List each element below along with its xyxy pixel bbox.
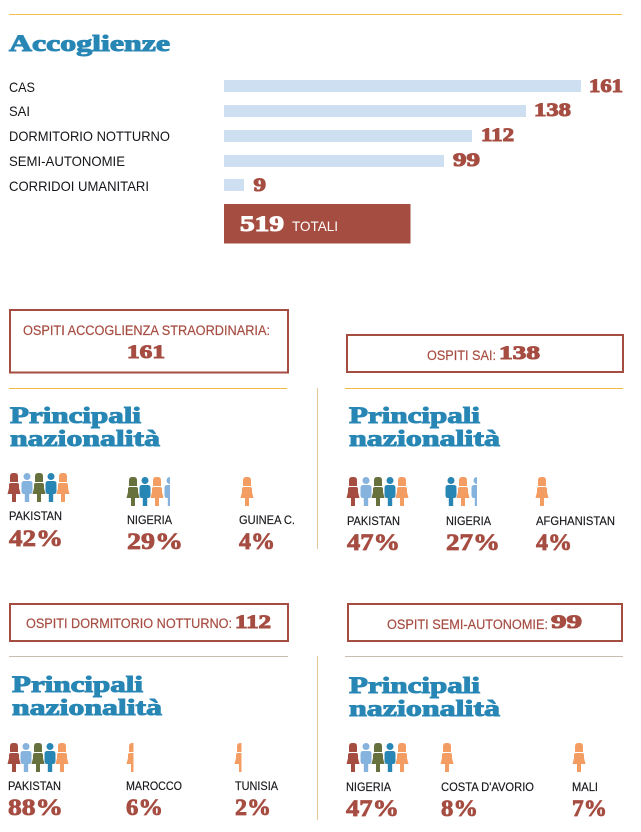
- bar chart: accoglienze: [9, 76, 623, 196]
- panel: nazionalità semi-autonomie: [346, 673, 607, 821]
- callout: ospiti semi-autonomie: 99: [551, 612, 582, 633]
- stat: Guinea C.: [239, 513, 295, 554]
- icon: Guinea: [240, 477, 254, 506]
- stat: Costa d'Avorio: [441, 780, 534, 821]
- heading: nazionalità: [10, 426, 161, 451]
- stat: Guinea C.: GUINEA C.: [239, 513, 295, 527]
- stat: Tunisia: TUNISIA: [235, 779, 278, 793]
- callout: ospiti semi-autonomie: [348, 604, 622, 641]
- heading: Principali: [10, 403, 142, 428]
- stat: Mali: 7%: [572, 796, 607, 821]
- callout: ospiti SAI: [347, 335, 623, 372]
- bar row: semi-autonomie: [9, 150, 480, 171]
- bar row: SAI: [9, 100, 571, 121]
- icon: Mali: [572, 743, 586, 772]
- callout: ospiti SAI: OSPITI SAI:: [427, 348, 496, 363]
- panel: nazionalità dormitorio: [8, 672, 278, 820]
- bar row: dormitorio notturno: [9, 125, 514, 146]
- stat: Pakistan: [347, 514, 400, 555]
- stat: Mali: MALI: [572, 780, 598, 794]
- total box: 519: [240, 211, 284, 236]
- icon group: Pakistan: [8, 473, 70, 502]
- bar row: dormitorio notturno: 112: [481, 125, 514, 146]
- callout: ospiti dormitorio notturno: 112: [235, 612, 271, 633]
- heading: [12, 672, 163, 720]
- stat: Pakistan: 42%: [9, 526, 63, 551]
- icon group: Nigeria: [446, 477, 477, 506]
- stat: Nigeria: NIGERIA: [346, 780, 391, 794]
- callout: ospiti semi-autonomie: OSPITI SEMI-AUTONOMIE:: [387, 617, 548, 632]
- stat: Pakistan: PAKISTAN: [8, 779, 61, 793]
- title: Accoglienze: [9, 31, 170, 56]
- stat: Pakistan: 88%: [8, 795, 63, 820]
- stat: Nigeria: [127, 513, 183, 554]
- bar row: CAS: 161: [589, 76, 623, 97]
- stat: Pakistan: PAKISTAN: [9, 509, 62, 523]
- stat: Afghanistan: [536, 514, 615, 555]
- stat: Pakistan: [9, 509, 63, 551]
- stat: Tunisia: [235, 779, 278, 820]
- stat: Nigeria: NIGERIA: [446, 514, 491, 528]
- icon group: Nigeria: [126, 477, 170, 506]
- icon: Costa d'Avorio: [440, 743, 454, 772]
- stat: Marocco: MAROCCO: [126, 779, 182, 793]
- stat: Nigeria: 47%: [346, 796, 399, 821]
- stat: Nigeria: 29%: [127, 529, 183, 554]
- callout: ospiti accoglienza straordinaria: OSPITI ACCOGLIENZA STRAORDINARIA:: [23, 323, 270, 338]
- callout: ospiti SAI: 138: [499, 343, 540, 364]
- bar row: corridoi umanitari: 9: [254, 175, 266, 196]
- stat: Pakistan: [8, 779, 63, 820]
- heading: [349, 673, 501, 721]
- bar row: corridoi umanitari: CORRIDOI UMANITARI: [9, 178, 149, 194]
- heading: Principali: [349, 673, 481, 698]
- icon group: Pakistan: [8, 743, 68, 772]
- panel: nazionalità SAI: [346, 403, 615, 555]
- stat: Nigeria: 27%: [446, 530, 500, 555]
- heading: [10, 403, 161, 451]
- icon: Afghanistan: [536, 477, 548, 506]
- stat: Afghanistan: AFGHANISTAN: [536, 514, 615, 528]
- bar row: dormitorio notturno: DORMITORIO NOTTURNO: [9, 128, 170, 144]
- stat: Tunisia: 2%: [235, 795, 271, 820]
- stat: Afghanistan: 4%: [536, 530, 572, 555]
- bar row: SAI: 138: [534, 100, 571, 121]
- stat: Costa d'Avorio: COSTA D'AVORIO: [441, 780, 534, 794]
- total box: TOTALI: [292, 218, 338, 234]
- stat: Nigeria: [346, 780, 399, 821]
- icon: Marocco: [126, 743, 134, 772]
- heading: Principali: [12, 672, 144, 697]
- icon group: Pakistan: [346, 477, 408, 506]
- heading: [349, 403, 501, 451]
- bar row: SAI: SAI: [9, 103, 30, 119]
- stat: Guinea C.: 4%: [239, 529, 275, 554]
- heading: Principali: [349, 403, 481, 428]
- total box: [224, 204, 410, 244]
- stat: Costa d'Avorio: 8%: [441, 796, 478, 821]
- stat: Marocco: [126, 779, 182, 820]
- callout: ospiti accoglienza straordinaria: [10, 310, 288, 372]
- stat: Mali: [572, 780, 607, 821]
- heading: nazionalità: [349, 426, 501, 451]
- stat: Pakistan: 47%: [347, 530, 400, 555]
- stat: Nigeria: NIGERIA: [127, 513, 172, 527]
- bar row: CAS: CAS: [9, 79, 35, 95]
- callout: ospiti accoglienza straordinaria: 161: [127, 342, 165, 363]
- stat: Marocco: 6%: [126, 795, 163, 820]
- callout: ospiti dormitorio notturno: [10, 604, 288, 641]
- panel: nazionalità CAS: [8, 403, 295, 554]
- callout: ospiti dormitorio notturno: OSPITI DORMITORIO NOTTURNO:: [26, 616, 232, 631]
- bar row: semi-autonomie: 99: [453, 150, 480, 171]
- bar row: CAS: [9, 76, 623, 97]
- heading: nazionalità: [349, 696, 501, 721]
- bar row: corridoi umanitari: [9, 175, 266, 196]
- bar row: semi-autonomie: SEMI-AUTONOMIE: [9, 153, 125, 169]
- icon: Tunisia: [234, 743, 242, 772]
- stat: Pakistan: PAKISTAN: [347, 514, 400, 528]
- heading: nazionalità: [12, 695, 163, 720]
- icon group: Nigeria: [346, 743, 408, 772]
- stat: Nigeria: [446, 514, 500, 555]
